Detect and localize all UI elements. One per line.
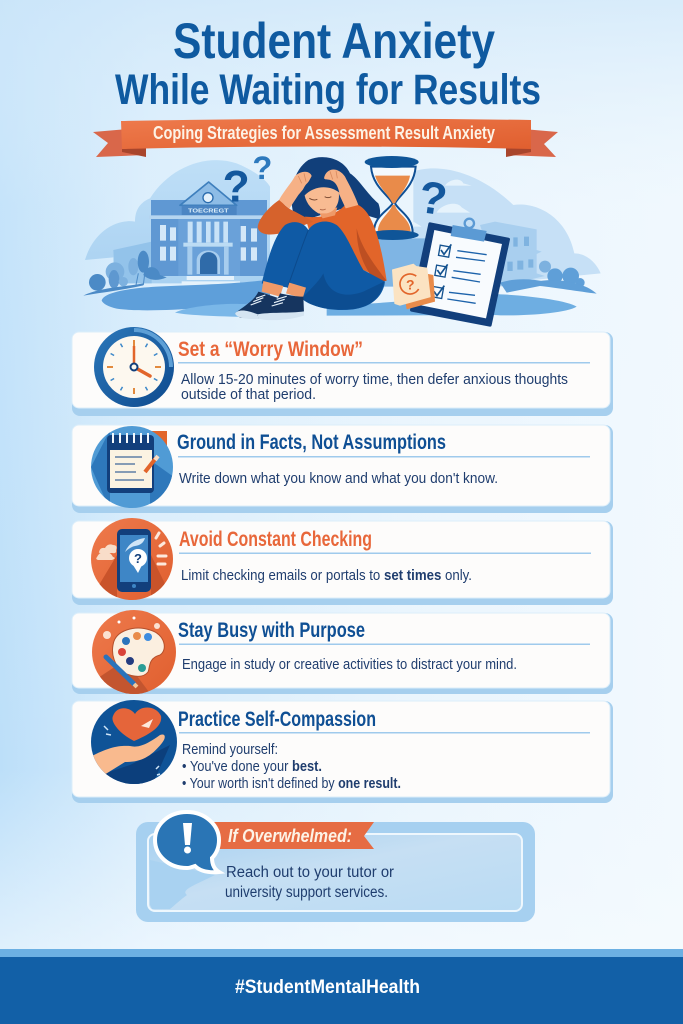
illustration: anxious student scene bbox=[83, 149, 601, 325]
footer band bbox=[0, 949, 683, 1024]
ribbon label bbox=[212, 822, 374, 849]
right scenery bbox=[327, 168, 601, 316]
student bbox=[235, 157, 387, 320]
card 4: stay busy with purpose bbox=[72, 610, 613, 700]
clipboard and sticky note: ? bbox=[406, 276, 415, 292]
title: Student Anxiety bbox=[173, 13, 495, 69]
icon: speech bubble bbox=[155, 812, 219, 872]
question marks left: ? bbox=[223, 163, 250, 212]
ground patches left bbox=[102, 279, 270, 310]
heading: Ground in Facts, Not Assumptions bbox=[177, 431, 446, 454]
body text: Allow 15-20 minutes of worry time, then defer anxious thoughts bbox=[181, 371, 568, 388]
university building: TOECREGT bbox=[188, 209, 229, 215]
icon: heart in hand bbox=[91, 700, 177, 784]
hourglass bbox=[365, 156, 419, 240]
icon: clock bbox=[94, 327, 174, 407]
subtitle ribbon: Coping Strategies for Assessment Result Anxiety bbox=[153, 123, 495, 143]
heading: Avoid Constant Checking bbox=[179, 528, 372, 551]
clipboard and sticky note bbox=[393, 219, 508, 325]
callout: if overwhelmed bbox=[136, 812, 535, 922]
card 2: ground in facts bbox=[72, 425, 613, 513]
subtitle ribbon bbox=[93, 119, 558, 157]
card 3: avoid constant checking bbox=[72, 518, 613, 605]
body text: • Your worth isn't defined by one result. bbox=[182, 775, 401, 792]
ribbon label: If Overwhelmed: bbox=[228, 826, 352, 846]
icon: phone bbox=[91, 518, 173, 605]
icon: notepad bbox=[91, 426, 178, 510]
card 1: worry window bbox=[72, 327, 613, 416]
card 5: practice self-compassion bbox=[72, 700, 613, 803]
heading: Stay Busy with Purpose bbox=[178, 619, 365, 642]
callout text: university support services. bbox=[225, 884, 388, 901]
body text: outside of that period. bbox=[181, 386, 316, 403]
heading: Practice Self-Compassion bbox=[178, 708, 376, 731]
question mark right: ? bbox=[416, 171, 450, 225]
body text: Limit checking emails or portals to set times only. bbox=[181, 567, 472, 584]
icon: palette bbox=[92, 610, 176, 700]
body text bbox=[182, 741, 401, 792]
question marks left bbox=[223, 149, 272, 212]
body text: • You've done your best. bbox=[182, 758, 322, 775]
body text: Remind yourself: bbox=[182, 741, 278, 758]
title: While Waiting for Results bbox=[115, 66, 541, 114]
body text: Write down what you know and what you don't know. bbox=[179, 470, 498, 487]
body text: Engage in study or creative activities to distract your mind. bbox=[182, 656, 517, 673]
hashtag: #StudentMentalHealth bbox=[235, 977, 420, 998]
left scenery bbox=[83, 149, 287, 318]
body text bbox=[181, 371, 568, 403]
icon: phone: ? bbox=[134, 551, 142, 566]
callout text: Reach out to your tutor or bbox=[226, 864, 394, 881]
callout text bbox=[225, 864, 394, 901]
question marks left: ? bbox=[252, 149, 272, 186]
title bbox=[115, 13, 541, 114]
heading: Set a “Worry Window” bbox=[178, 338, 363, 361]
trees and bushes bbox=[83, 251, 167, 296]
university building bbox=[149, 182, 270, 285]
